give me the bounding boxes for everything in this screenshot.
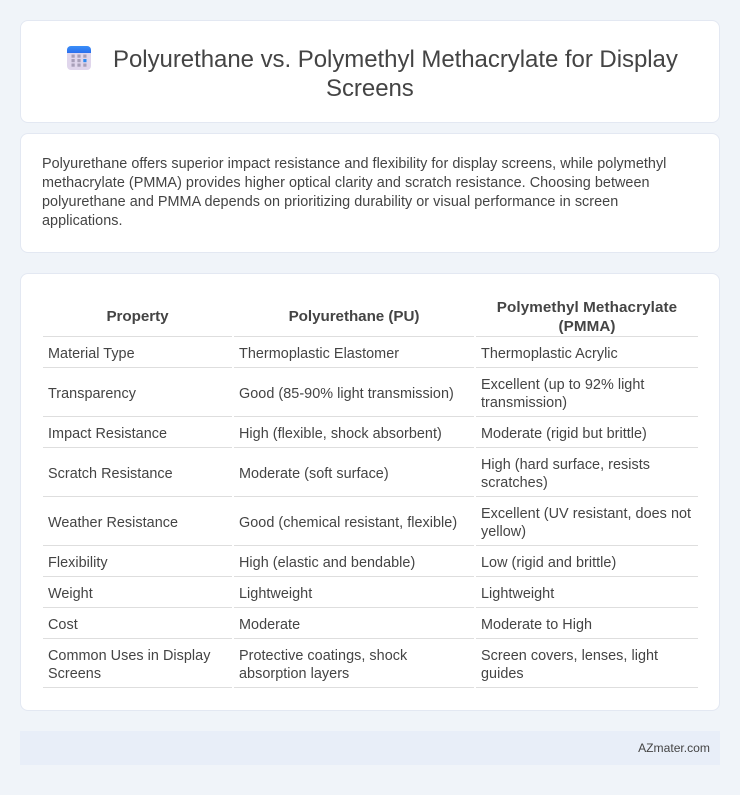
row: flexibility [43,545,698,571]
row: scratch resistance [43,447,698,491]
panel: title card [20,20,720,123]
row: flexibility: Low (rigid and brittle) [481,555,616,571]
row: weather resistance: Weather Resistance [48,515,178,531]
row: scratch resistance: Scratch Resistance [48,466,173,482]
row: weight: Lightweight [481,586,554,602]
summary text: Polyurethane offers superior impact resistance and flexibility for display screens, while polymethyl [42,156,666,172]
row: weather resistance [43,496,698,540]
row: flexibility: High (elastic and bendable) [239,555,415,571]
row: scratch resistance: scratches) [481,475,548,491]
panel: comparison table card [20,273,720,711]
row: impact resistance: Impact Resistance [48,426,167,442]
row: common uses: Common Uses in Display [48,648,210,664]
row: weather resistance: Excellent (UV resistant, does not [481,506,691,522]
row: impact resistance: High (flexible, shock absorbent) [239,426,442,442]
row: material type: Material Type [48,346,135,362]
row: common uses: Screens [48,666,101,682]
title [113,46,678,102]
row: cost: Moderate to High [481,617,592,633]
row: material type: Thermoplastic Elastomer [239,346,399,362]
icon: calendar [67,46,91,70]
summary text: methacrylate (PMMA) provides higher optical clarity and scratch resistance. Choosing between [42,175,650,191]
row: weight: Weight [48,586,93,602]
row: weather resistance: yellow) [481,524,526,540]
row: impact resistance: Moderate (rigid but brittle) [481,426,647,442]
row: scratch resistance: High (hard surface, resists [481,457,650,473]
footer credit: AZmater.com [638,741,710,755]
panel: summary card [20,133,720,253]
row: flexibility: Flexibility [48,555,108,571]
table header [106,299,677,335]
summary text: polyurethane and PMMA depends on prioritizing durability or visual performance in screen [42,194,618,210]
row: material type [43,336,698,362]
row: weight: Lightweight [239,586,312,602]
row: transparency [43,367,698,411]
header: pmma: Polymethyl Methacrylate [497,299,677,316]
row: common uses: Screen covers, lenses, light [481,648,658,664]
row: common uses: Protective coatings, shock [239,648,407,664]
row: cost: Moderate [239,617,300,633]
title: Polyurethane vs. Polymethyl Methacrylate for Display [113,46,678,73]
header: property: Property [106,308,169,325]
header: polyurethane: Polyurethane (PU) [289,308,419,325]
row: weight [43,576,698,602]
summary text [42,156,666,229]
summary text: applications. [42,213,123,229]
row: common uses: guides [481,666,524,682]
row: weather resistance: Good (chemical resistant, flexible) [239,515,457,531]
row: transparency: Transparency [48,386,136,402]
title: Screens [326,75,414,102]
row: transparency: Excellent (up to 92% light [481,377,644,393]
row: scratch resistance: Moderate (soft surface) [239,466,389,482]
header: pmma: (PMMA) [558,318,616,335]
row: material type: Thermoplastic Acrylic [481,346,618,362]
row: transparency: transmission) [481,395,567,411]
row: cost [43,607,698,633]
row: common uses [43,638,698,688]
header: pmma [497,299,677,335]
row: transparency: Good (85-90% light transmission) [239,386,454,402]
footer bar [20,731,720,765]
row: impact resistance [43,416,698,442]
row: cost: Cost [48,617,78,633]
row: common uses: absorption layers [239,666,349,682]
